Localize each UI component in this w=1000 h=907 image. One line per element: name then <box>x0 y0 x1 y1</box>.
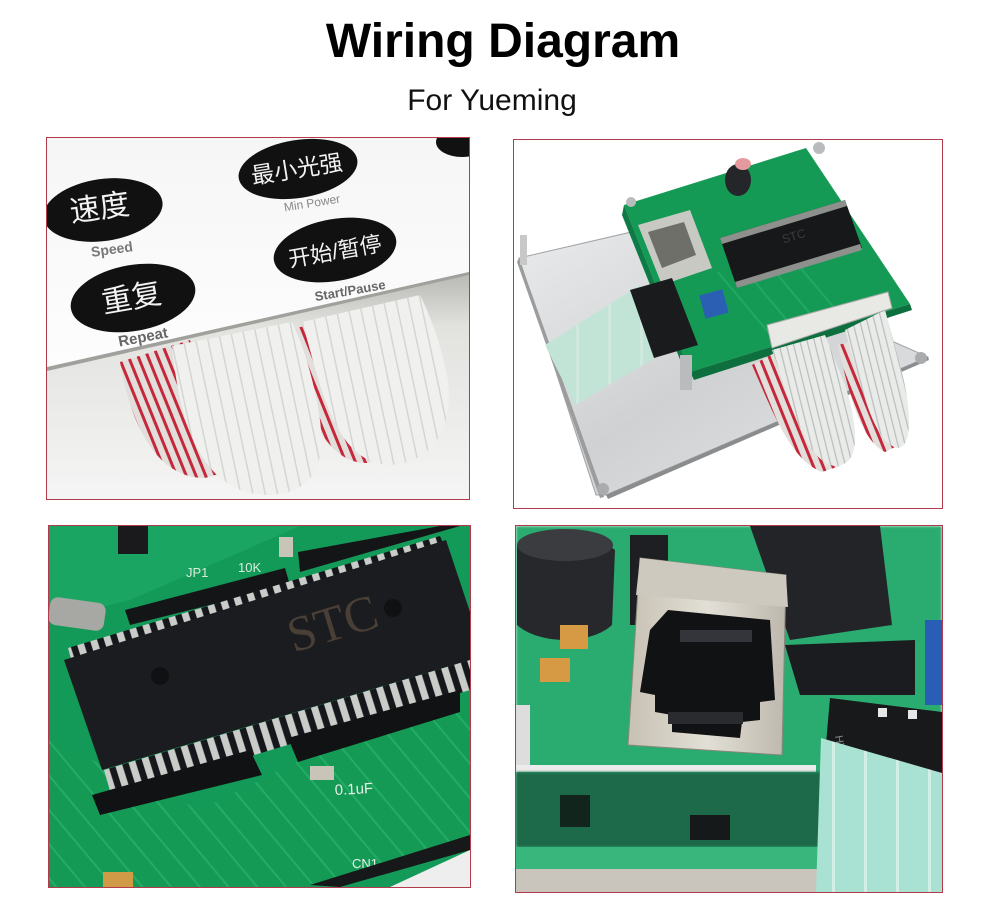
panel: stc chip close-up: 10K <box>238 560 261 575</box>
teal ribbon <box>816 738 942 892</box>
keypad button: speed: Speed <box>90 238 134 260</box>
keypad button: speed: 速度 <box>68 188 132 229</box>
keypad button: repeat: 重复 <box>99 277 164 320</box>
circuit traces <box>49 700 470 887</box>
chip markings: STC <box>280 583 384 663</box>
stc chip body <box>64 540 470 770</box>
white corner <box>390 850 470 887</box>
panel border 2 <box>514 140 942 508</box>
component labels: 0.1uF <box>334 780 374 799</box>
keypad button: min power: Min Power <box>283 192 341 214</box>
panel: stc chip close-up <box>47 526 470 887</box>
panel: control board on plate: STC <box>780 226 808 246</box>
blue trimmer <box>925 620 943 705</box>
panel: stc chip close-up: JP1 <box>186 565 208 580</box>
title: Wiring Diagram <box>326 15 680 68</box>
ribbon connector <box>825 698 942 773</box>
upper socket <box>125 568 290 625</box>
bottom connector row <box>310 835 470 887</box>
white ribbon <box>772 335 855 466</box>
ribbon: first white loop <box>172 322 321 495</box>
ribbon: left red loop <box>120 340 216 478</box>
lower sockets <box>92 750 262 815</box>
panel: ethernet jack close-up: HY-S4R <box>832 734 851 775</box>
chip bottom pins <box>104 660 470 798</box>
aluminium plate <box>519 230 928 495</box>
subtitle: For Yueming <box>407 84 577 117</box>
lower board shadow <box>516 772 821 847</box>
keypad button: start pause <box>274 218 396 301</box>
black connector <box>630 278 698 358</box>
panel: stc chip close-up: CN1 <box>352 856 378 871</box>
panel: ethernet jack close-up <box>516 526 943 892</box>
panel: control board on plate <box>514 140 942 508</box>
keypad button: start pause: 开始/暂停 <box>287 231 384 272</box>
panel border 4 <box>516 526 942 892</box>
ethernet jack <box>638 210 712 285</box>
capacitor <box>725 164 751 196</box>
keypad button: start pause: Start/Pause <box>314 277 387 304</box>
red sides of ribbon <box>752 350 840 472</box>
panel: keypad with ribbon cables <box>39 127 488 499</box>
green pcb <box>624 148 910 372</box>
white board edge <box>516 765 816 772</box>
keypad button: speed <box>47 178 163 258</box>
small smd parts <box>310 766 334 780</box>
ribbon: second white loop <box>302 295 449 465</box>
white header connector <box>767 292 892 348</box>
standoffs <box>680 355 692 390</box>
panel border 1 <box>46 138 470 500</box>
keypad button: min power <box>238 138 358 212</box>
keypad button: repeat: Repeat <box>117 324 169 351</box>
rear ic <box>750 526 892 640</box>
keypad button: repeat <box>70 264 196 346</box>
panel border 3 <box>48 526 470 888</box>
keypad button: min power: 最小光强 <box>249 149 344 189</box>
ethernet jack <box>628 558 786 755</box>
stc chip <box>720 200 862 288</box>
crystal <box>47 596 107 632</box>
orange capacitors <box>560 625 588 649</box>
buzzer <box>517 545 615 640</box>
blue potentiometer <box>699 289 729 319</box>
keypad button: partial <box>436 138 469 157</box>
ribbon strip translucent <box>545 286 654 405</box>
chip top pins <box>68 536 447 666</box>
membrane panel <box>47 270 469 367</box>
ribbon: middle red loop <box>299 326 372 463</box>
